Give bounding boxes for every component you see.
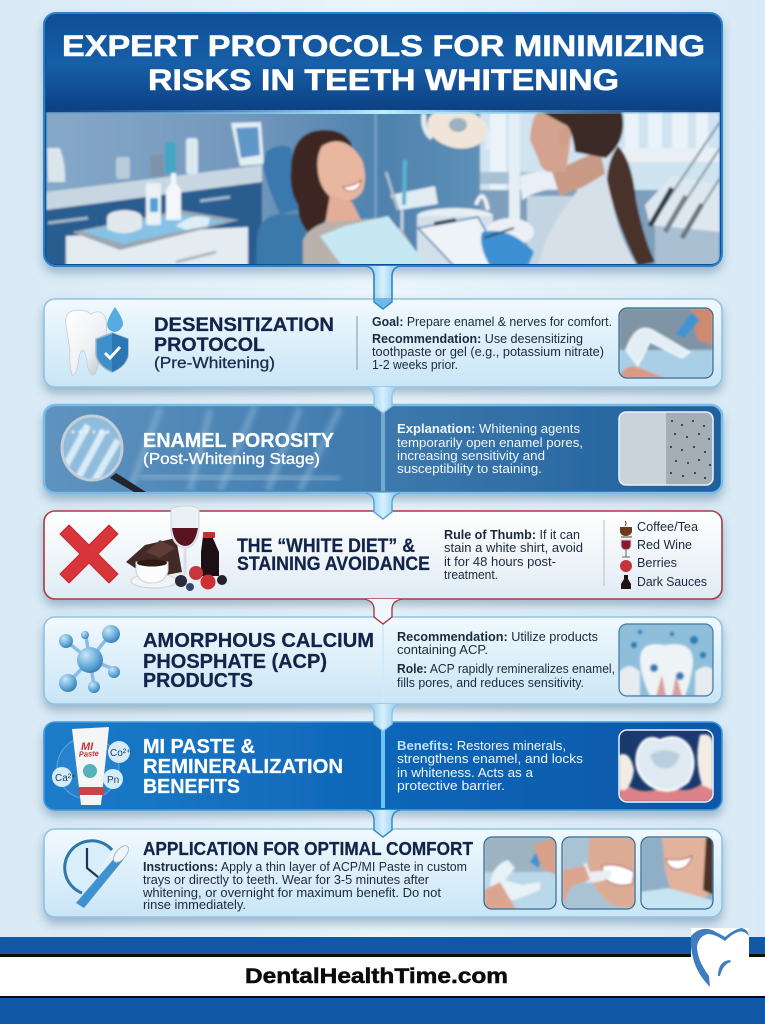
image: coated molar	[619, 730, 713, 802]
text block: stain a white shirt, avoid	[444, 540, 583, 555]
text block: treatment.	[444, 567, 498, 582]
text block: it for 48 hours post-	[444, 554, 556, 569]
text block	[444, 527, 583, 582]
icon: MI Paste tube with mineral bubbles: Co²⁺	[110, 748, 131, 759]
text block: toothpaste or gel (e.g., potassium nitrate)	[372, 344, 604, 359]
image: tooth with minerals	[619, 624, 713, 696]
image: inserting tray	[562, 837, 635, 909]
heading: ENAMEL POROSITY	[143, 430, 335, 452]
counter objects	[47, 148, 65, 182]
texture	[127, 406, 344, 491]
text block	[397, 738, 583, 793]
heading: THE “WHITE DIET” &	[237, 536, 415, 557]
lamp	[424, 114, 488, 150]
icon: MI Paste tube with mineral bubbles: Pn	[107, 775, 119, 786]
arrow: stem re-drawn over card top	[374, 298, 392, 309]
icon: magnifying glass on enamel	[62, 416, 146, 492]
text block	[397, 629, 615, 690]
icon: staining foods and drinks	[126, 506, 227, 591]
icon: MI Paste tube with mineral bubbles: Paste	[79, 749, 100, 759]
panel: MI Paste and remineralization	[44, 722, 722, 810]
instruments	[645, 176, 720, 232]
text block: increasing sensitivity and	[397, 448, 545, 463]
icon: molecule	[59, 625, 120, 693]
heading: PHOSPHATE (ACP)	[143, 651, 327, 673]
tray cart	[66, 227, 248, 266]
list: foods to avoid: Berries	[637, 555, 677, 570]
text block: Instructions: Apply a thin layer of ACP/MI Paste in custom	[143, 859, 467, 874]
arrow: connector from header to first card	[366, 266, 400, 309]
heading: REMINERALIZATION	[143, 756, 343, 778]
heading: PROTOCOL	[154, 335, 265, 356]
text block: Explanation: Whitening agents	[397, 421, 580, 436]
text block: Rule of Thumb: If it can	[444, 527, 580, 542]
icon: tooth with drop and shield	[66, 307, 128, 375]
list: foods to avoid: Dark Sauces	[637, 574, 707, 589]
text block: Benefits: Restores minerals,	[397, 738, 566, 753]
icon: MI Paste tube with mineral bubbles	[52, 727, 131, 805]
heading: (Pre-Whitening)	[154, 355, 275, 372]
heading: MI PASTE &	[143, 736, 255, 758]
icon: clock and applicator brush	[65, 841, 131, 908]
window and blinds	[480, 112, 720, 190]
heading: PRODUCTS	[143, 670, 253, 692]
icon: MI Paste tube with mineral bubbles: MI	[81, 741, 94, 753]
heading: DESENSITIZATION	[154, 315, 334, 336]
title	[62, 30, 705, 97]
heading	[237, 536, 430, 575]
image: smooth versus porous enamel	[619, 412, 713, 485]
text block	[372, 314, 612, 372]
text block	[142, 859, 467, 912]
text block: whitening, or overnight for maximum benefit. Do not	[142, 885, 441, 900]
icon: MI Paste tube with mineral bubbles: Ca²⁺	[55, 773, 76, 784]
text block: protective barrier.	[397, 778, 505, 793]
heading	[154, 315, 334, 372]
patient	[291, 130, 352, 236]
heading: BENEFITS	[143, 776, 240, 798]
text block: containing ACP.	[397, 642, 488, 657]
text block: in whiteness. Acts as a	[397, 765, 534, 780]
panel: application for optimal comfort	[44, 829, 722, 917]
heading	[143, 736, 343, 798]
text block: fills pores, and reduces sensitivity.	[397, 675, 584, 690]
arrow: connector from first to second card	[366, 387, 400, 413]
text block	[397, 421, 583, 476]
heading: APPLICATION FOR OPTIMAL COMFORT	[143, 839, 473, 859]
clinic photo	[46, 102, 720, 266]
panel: white diet and staining avoidance	[44, 506, 722, 599]
text block: trays or directly to teeth. Wear for 3-5 minutes after	[143, 872, 430, 887]
text block: temporarily open enamel pores,	[397, 435, 583, 450]
arrow: connector from fifth to sixth card	[366, 810, 400, 837]
heading: (Post-Whitening Stage)	[143, 451, 320, 468]
icon: red cross	[60, 525, 118, 583]
panel: enamel porosity	[44, 405, 722, 493]
arrow: connector from fourth to fifth card	[366, 704, 400, 731]
title: EXPERT PROTOCOLS FOR MINIMIZING	[62, 30, 705, 63]
chair	[263, 146, 298, 214]
dental unit	[390, 186, 438, 210]
heading	[143, 630, 374, 692]
panel: amorphous calcium phosphate	[44, 617, 722, 704]
heading	[143, 430, 335, 468]
arrow: connector from second to third card	[366, 493, 400, 519]
image: applying gel to tray	[619, 308, 713, 378]
text block: Role: ACP rapidly remineralizes enamel,	[397, 661, 615, 676]
footer band	[0, 937, 765, 1024]
counter and cabinets	[46, 165, 262, 210]
image: applying paste to tray	[484, 837, 556, 909]
title: RISKS IN TEETH WHITENING	[148, 64, 619, 97]
website name: DentalHealthTime.com	[245, 965, 508, 988]
list: foods to avoid	[620, 519, 707, 589]
icon: tooth logo	[691, 928, 749, 987]
text block: 1-2 weeks prior.	[372, 357, 458, 372]
text block: Goal: Prepare enamel & nerves for comfort.	[372, 314, 612, 329]
text block: rinse immediately.	[143, 897, 246, 912]
heading: AMORPHOUS CALCIUM	[143, 630, 374, 652]
heading: STAINING AVOIDANCE	[237, 554, 430, 575]
text block: Recommendation: Use desensitizing	[372, 331, 583, 346]
text block: susceptibility to staining.	[397, 461, 542, 476]
list: foods to avoid: Red Wine	[637, 537, 692, 552]
list: foods to avoid: Coffee/Tea	[637, 519, 699, 534]
panel: desensitization protocol	[44, 298, 722, 387]
text block: Recommendation: Utilize products	[397, 629, 598, 644]
image: smiling patient	[641, 837, 713, 909]
clipboard	[416, 215, 490, 264]
dentist	[552, 150, 606, 196]
arrow: connector from third to fourth card	[364, 599, 402, 624]
panel: header with title and clinic photo	[44, 13, 722, 266]
text block: strengthens enamel, and locks	[397, 751, 583, 766]
